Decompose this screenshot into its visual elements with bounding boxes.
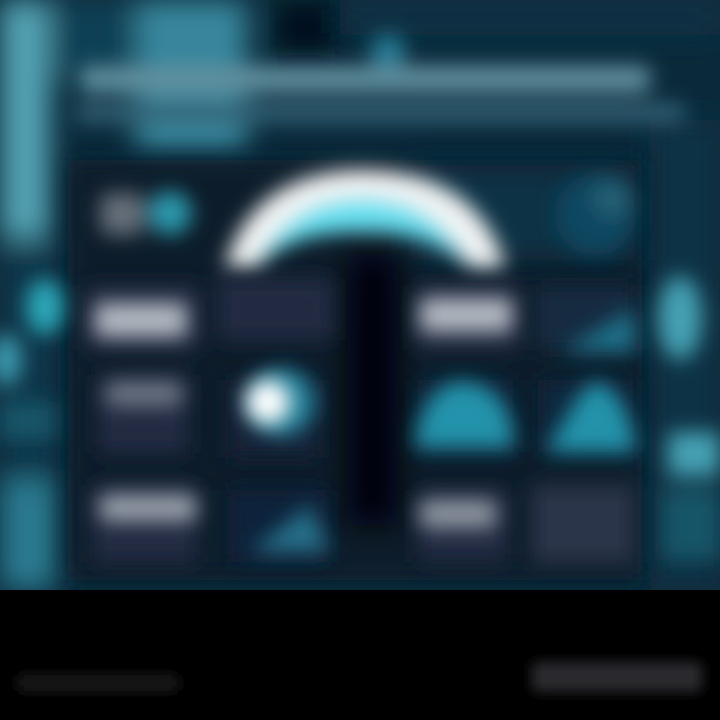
footer: left blurred label xyxy=(18,675,178,691)
heading: blurred title lines xyxy=(75,34,685,122)
icon: glowing white dot xyxy=(246,368,316,436)
charts: cyan mountain shapes xyxy=(250,308,636,552)
panel: main dark dashboard xyxy=(68,160,642,580)
side icons: teal blobs xyxy=(0,276,720,560)
icon: top-left badge xyxy=(100,191,192,235)
panel: central dark column xyxy=(348,255,398,525)
text blocks: blurred light labels xyxy=(95,298,512,528)
panel: upper right teal tint xyxy=(410,165,635,260)
footer: right blurred label xyxy=(532,662,702,692)
icon: top-right circle xyxy=(555,175,635,255)
chart: white and cyan gauge arc xyxy=(225,170,505,268)
panels: grid cells xyxy=(85,278,635,563)
